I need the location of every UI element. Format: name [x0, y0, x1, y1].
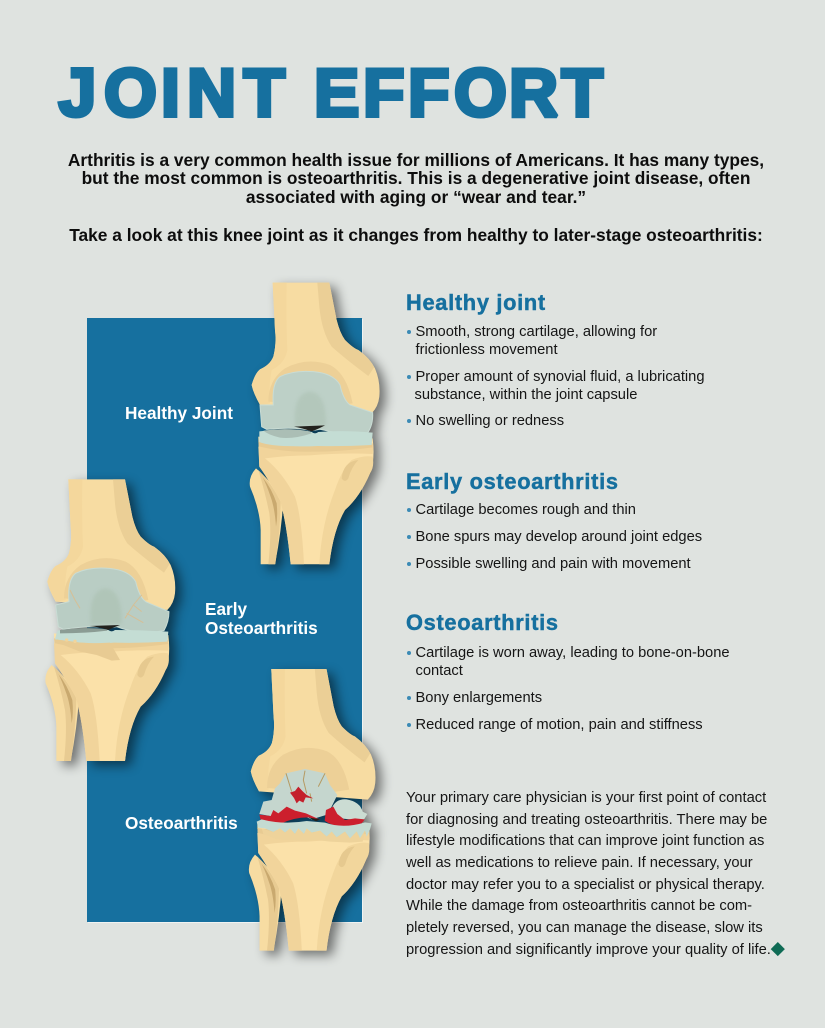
femoral cartilage	[56, 568, 169, 632]
section: healthy joint: frictionless movement	[416, 342, 558, 358]
intro text: Take a look at this knee joint as it changes from healthy to later-stage osteoarthritis:	[69, 225, 763, 245]
section: early osteoarthritis: Early osteoarthritis	[406, 469, 619, 494]
closing paragraph: lifestyle modifications that can improve joint function as	[406, 833, 764, 849]
red lesion	[290, 787, 313, 803]
section: early osteoarthritis: Cartilage becomes rough and thin	[416, 502, 636, 518]
cartilage dome	[295, 392, 326, 426]
knee: early osteoarthritis	[45, 479, 175, 761]
section: osteoarthritis: Reduced range of motion, pain and stiffness	[416, 717, 703, 733]
cracks	[70, 590, 143, 623]
intro text: Arthritis is a very common health issue for millions of Americans. It has many types,	[68, 150, 764, 170]
panel label: early osteoarthritis: Early	[205, 599, 247, 619]
icon: end diamond	[771, 942, 785, 956]
closing paragraph: Your primary care physician is your first point of contact	[406, 790, 766, 806]
section: healthy joint	[406, 290, 705, 429]
section: healthy joint: No swelling or redness	[416, 413, 564, 429]
closing paragraph: progression and significantly improve your quality of life.	[406, 942, 771, 958]
knee: osteoarthritis	[249, 669, 375, 951]
section: early osteoarthritis	[406, 469, 702, 572]
section: healthy joint: Proper amount of synovial fluid, a lubricating	[416, 369, 705, 385]
section: osteoarthritis: contact	[416, 663, 463, 679]
closing paragraph: While the damage from osteoarthritis cannot be com-	[406, 898, 752, 914]
intro text	[68, 150, 764, 245]
cracks	[286, 771, 325, 802]
section: early osteoarthritis: Bone spurs may develop around joint edges	[416, 529, 702, 545]
section: early osteoarthritis: Possible swelling and pain with movement	[416, 556, 691, 572]
joint gap	[89, 625, 120, 630]
section: healthy joint: Healthy joint	[406, 290, 546, 315]
femoral cartilage	[260, 371, 373, 434]
panel label: early osteoarthritis	[205, 599, 318, 638]
bony growth	[332, 799, 367, 821]
section: osteoarthritis: Cartilage is worn away, leading to bone-on-bone	[416, 645, 730, 661]
knee: healthy joint	[250, 283, 380, 564]
cartilage dome	[90, 588, 122, 624]
closing paragraph: for diagnosing and treating osteoarthritis. There may be	[406, 812, 767, 828]
closing paragraph: pletely reversed, you can manage the disease, slow its	[406, 920, 763, 936]
tibial cartilage	[55, 629, 168, 643]
panel label: osteoarthritis: Osteoarthritis	[125, 813, 238, 833]
section: healthy joint: substance, within the joint capsule	[414, 387, 637, 403]
joint gap	[308, 817, 320, 821]
tibial cartilage	[259, 430, 373, 446]
section: osteoarthritis: Bony enlargements	[416, 690, 542, 706]
closing paragraph	[406, 790, 771, 958]
panel label: early osteoarthritis: Osteoarthritis	[205, 618, 318, 638]
section: osteoarthritis: Osteoarthritis	[406, 610, 559, 635]
rough cartilage edge	[55, 639, 120, 661]
red inflammation	[259, 807, 321, 824]
title: JOINT EFFORT	[58, 55, 603, 131]
closing paragraph: well as medications to relieve pain. If necessary, your	[406, 855, 753, 871]
section: healthy joint: Smooth, strong cartilage, allowing for	[416, 324, 657, 340]
joint gap	[294, 425, 325, 431]
intro text: associated with aging or “wear and tear.”	[246, 187, 586, 207]
tibial cartilage	[257, 819, 372, 838]
section: osteoarthritis	[406, 610, 730, 733]
intro text: but the most common is osteoarthritis. This is a degenerative joint disease, often	[82, 168, 750, 188]
panel label: healthy joint: Healthy Joint	[125, 403, 233, 423]
blue background panel	[87, 318, 362, 922]
broken cartilage	[259, 769, 337, 819]
closing paragraph: doctor may refer you to a specialist or physical therapy.	[406, 877, 765, 893]
